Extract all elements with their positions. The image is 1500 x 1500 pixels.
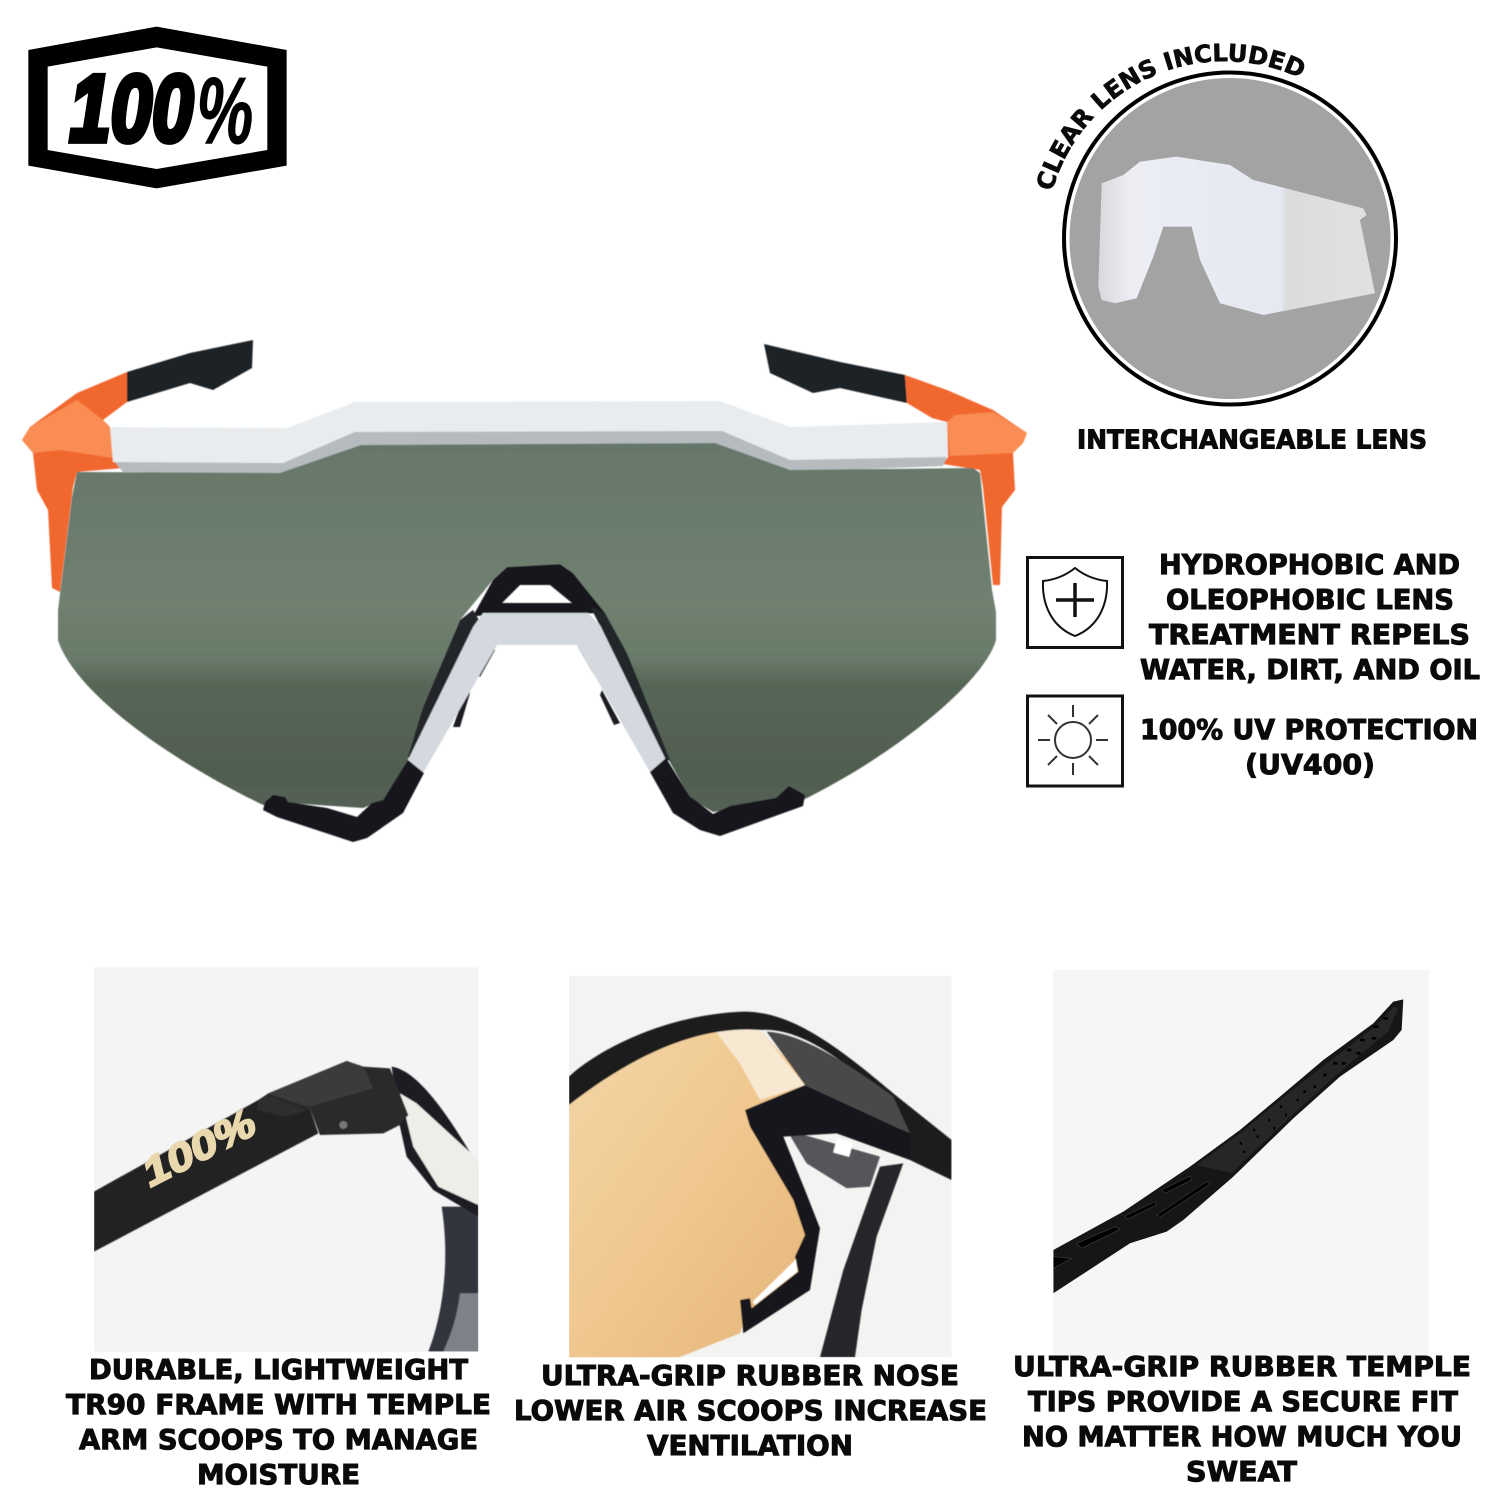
caption: nose: VENTILATION (647, 1430, 853, 1462)
curved title: CLEAR LENS INCLUDED (1037, 43, 1304, 189)
caption: frame: TR90 FRAME WITH TEMPLE (66, 1389, 491, 1421)
arm facet (258, 1096, 306, 1116)
feature text: 100% UV PROTECTION (1140, 714, 1478, 746)
lower lens ring (428, 1207, 478, 1352)
nose bridge: white pad (408, 613, 666, 773)
panel: interchangeable lens (1037, 43, 1427, 456)
feature text (1140, 549, 1480, 686)
caption: nose (514, 1360, 987, 1462)
gold lens (569, 1028, 818, 1358)
logo: 100% badge (28, 27, 287, 188)
main product: sunglasses front view (22, 340, 1027, 842)
caption: frame: ARM SCOOPS TO MANAGE (79, 1424, 478, 1456)
lower frame right (650, 758, 805, 836)
rear frame dark band (392, 1067, 478, 1217)
feature text (1140, 714, 1478, 781)
temple tip right (764, 344, 907, 403)
feature text: OLEOPHOBIC LENS (1166, 584, 1454, 616)
caption: temple tips: NO MATTER HOW MUCH YOU (1022, 1421, 1462, 1453)
textured plate (1197, 1007, 1398, 1173)
caption: frame: MOISTURE (197, 1459, 360, 1491)
feature text: WATER, DIRT, AND OIL (1140, 654, 1480, 686)
slots (1053, 1176, 1210, 1268)
lens circle ring (1064, 72, 1396, 404)
black nose frame (740, 1085, 910, 1333)
clear lens (1098, 157, 1375, 315)
white brow bar (110, 401, 948, 463)
caption: nose: ULTRA-GRIP RUBBER NOSE (541, 1360, 959, 1392)
feature text: HYDROPHOBIC AND (1159, 549, 1460, 581)
feature text: (UV400) (1245, 749, 1375, 781)
lens circle background (1070, 78, 1390, 399)
arm logo text: 100% (135, 1101, 263, 1195)
lens caption: INTERCHANGEABLE LENS (1077, 426, 1427, 456)
gap slit (753, 1259, 797, 1305)
caption: nose: LOWER AIR SCOOPS INCREASE (514, 1395, 987, 1427)
photo panel: frame hinge (94, 967, 478, 1352)
caption: temple tips: TIPS PROVIDE A SECURE FIT (1028, 1386, 1458, 1418)
lens (58, 443, 996, 812)
temple arm (94, 1093, 318, 1252)
caption: temple tips: ULTRA-GRIP RUBBER TEMPLE (1013, 1351, 1471, 1383)
logo: 100% badge: 100 (69, 56, 193, 162)
hinge block (268, 1061, 408, 1135)
white reflection on frame (400, 1093, 478, 1205)
grey rubber nose pad (787, 1130, 880, 1188)
lower frame left (263, 760, 424, 842)
caption: frame (66, 1354, 491, 1491)
icon box: shield (1028, 558, 1122, 648)
photo panel: temple tip (1053, 970, 1429, 1360)
feature: hydrophobic lens (1028, 549, 1480, 686)
temple tip left (127, 340, 253, 402)
grey brow underside (113, 429, 948, 475)
temple tip strip (1053, 999, 1403, 1293)
orange frame right (905, 375, 1027, 585)
nose bridge: black side left (408, 610, 482, 765)
dots (1240, 1018, 1388, 1152)
caption: temple tips: SWEAT (1186, 1456, 1297, 1488)
caption: temple tips (1013, 1351, 1471, 1488)
feature text: TREATMENT REPELS (1149, 619, 1470, 651)
orange frame left (22, 372, 127, 592)
top frame band (569, 1012, 952, 1180)
nose pads small (453, 645, 620, 727)
orange wing highlight right (947, 412, 1027, 456)
caption: frame: DURABLE, LIGHTWEIGHT (89, 1354, 468, 1386)
feature: uv protection (1028, 696, 1478, 786)
icon box: sun (1028, 696, 1122, 786)
orange wing highlight left (22, 400, 113, 458)
nose bridge: black side right (590, 606, 670, 762)
temple arm down (820, 1163, 903, 1357)
nose bridge: black arch (473, 564, 605, 616)
photo panel: rubber nose (569, 976, 952, 1358)
logo: 100% badge: % (197, 58, 253, 164)
